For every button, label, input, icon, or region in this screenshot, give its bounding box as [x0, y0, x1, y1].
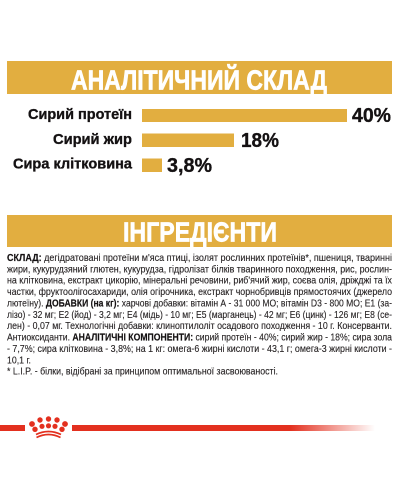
row: crude fat: 18% — [241, 129, 279, 152]
divider: red line right with fade — [72, 425, 375, 431]
panel: ingredients banner — [7, 215, 392, 248]
row: crude fat — [53, 129, 279, 152]
row: crude protein — [28, 104, 391, 127]
row: crude fibre: Сира клітковина — [13, 156, 133, 172]
text block: ingredients list: 10,1 г. — [7, 355, 31, 366]
icon: royal crown logo — [29, 416, 68, 438]
row: crude fat: Сирий жир — [53, 131, 132, 148]
heading: ingredients: ІНГРЕДІЄНТИ — [123, 216, 277, 248]
row: crude fibre: 3,8% — [167, 154, 212, 177]
row: crude fibre — [13, 154, 212, 177]
row: crude protein: Сирий протеїн — [28, 106, 132, 123]
text block: ingredients list — [7, 253, 393, 378]
divider: red line left — [0, 425, 25, 431]
row: crude protein: 40% — [352, 104, 391, 127]
heading: analytical composition: АНАЛІТИЧНИЙ СКЛАД — [71, 64, 327, 96]
bar chart: analytical composition — [13, 104, 391, 177]
text block: ingredients list: * L.I.P. - білки, відібрані за принципом оптимальної засвоюваності. — [7, 366, 278, 378]
panel: analytical composition banner — [7, 61, 392, 96]
